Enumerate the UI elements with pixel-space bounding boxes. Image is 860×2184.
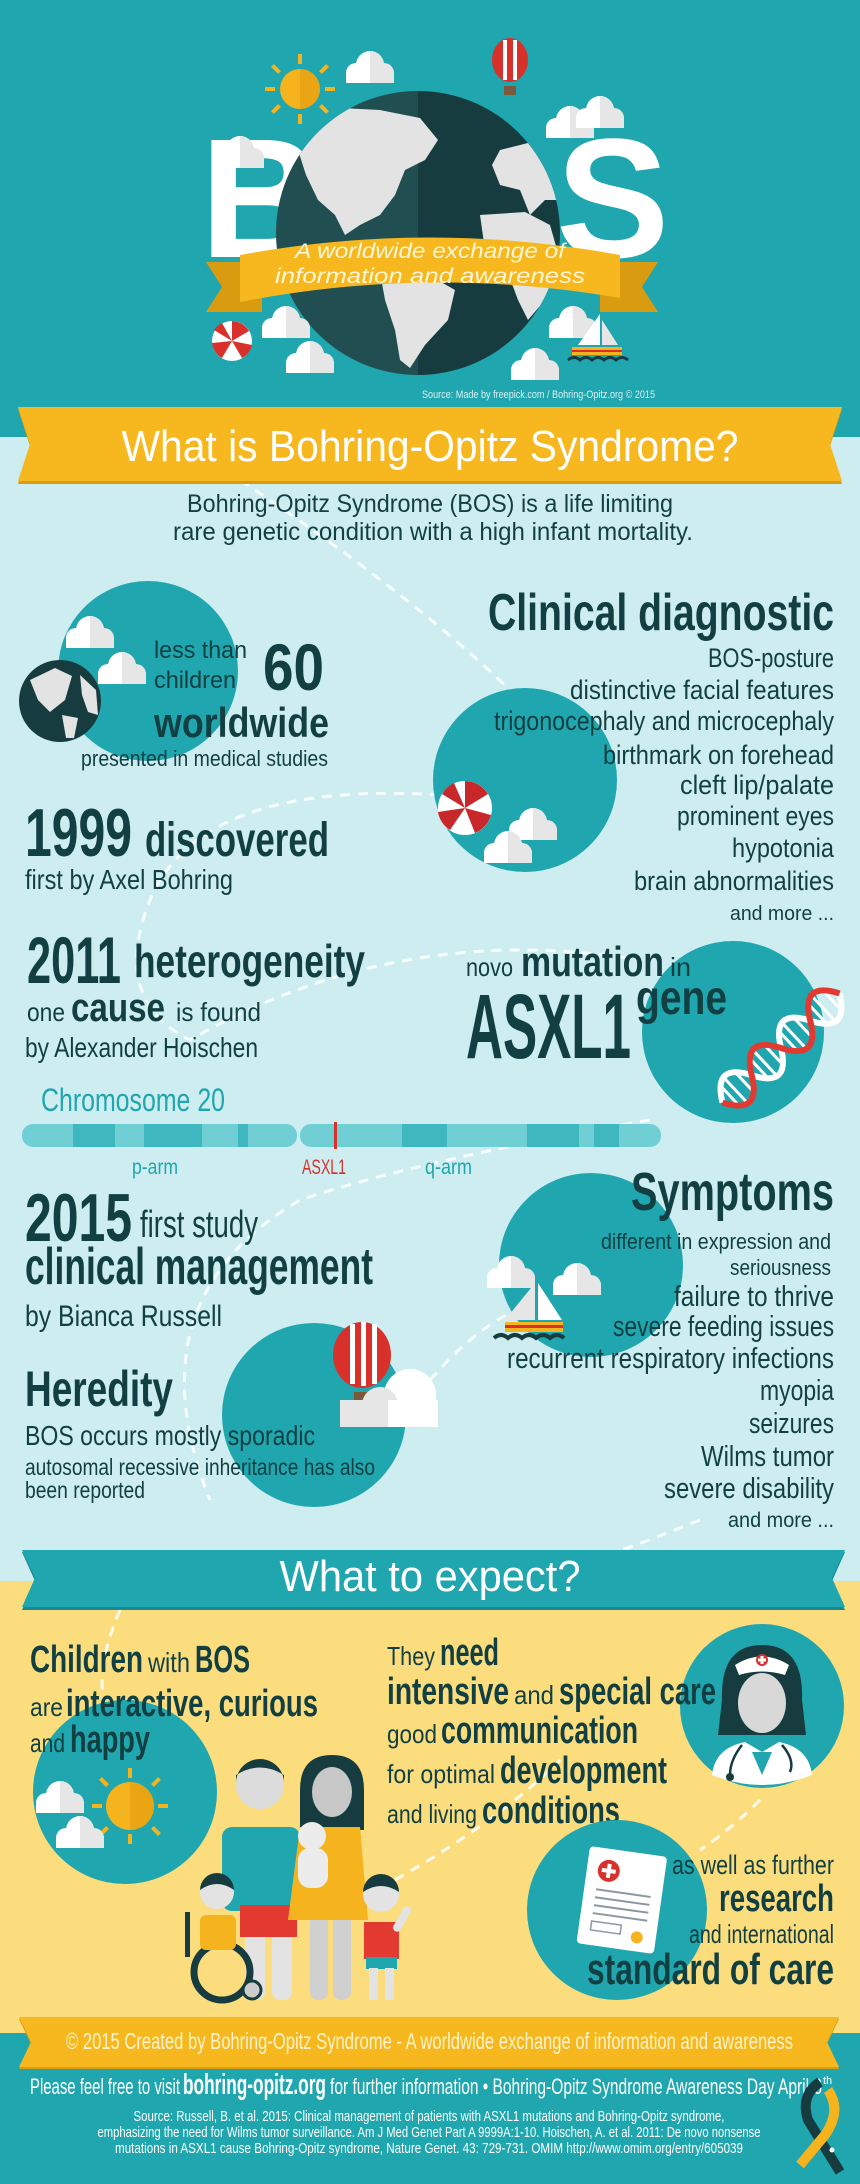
panel: clinical diagnostic: and more ...	[730, 903, 834, 925]
panel: children with BOS: Children	[30, 1639, 143, 1681]
father	[245, 1900, 265, 2000]
panel: ASXL1 gene: mutation	[521, 938, 664, 985]
panel: they need care: special care	[559, 1671, 716, 1713]
text: 2015 first study: by Bianca Russell	[25, 1300, 222, 1333]
panel: research and standard of care	[527, 1820, 834, 2000]
panel: they need care: good	[387, 1719, 437, 1749]
panel: they need care: and	[514, 1680, 554, 1710]
illustration: family	[185, 1755, 412, 2000]
banner: What to expect?: What to expect?	[280, 1552, 580, 1601]
footer banner	[19, 2017, 839, 2069]
circle	[58, 581, 238, 761]
panel: clinical diagnostic	[433, 584, 835, 925]
panel: clinical diagnostic: cleft lip/palate	[680, 770, 834, 800]
panel: heredity: Heredity	[25, 1361, 173, 1417]
footer info line: th	[823, 2075, 832, 2087]
text: 2015 first study	[25, 1180, 373, 1333]
panel: clinical diagnostic: brain abnormalities	[634, 866, 834, 896]
icon: beach ball	[212, 321, 252, 361]
footer info line	[30, 2069, 832, 2101]
hero: BOS logo with globe	[200, 38, 669, 401]
mother	[300, 1755, 364, 1830]
text: 2011 heterogeneity	[25, 923, 365, 1063]
panel: clinical diagnostic: birthmark on forehead	[603, 740, 834, 770]
text: 1999 discovered: discovered	[145, 814, 329, 867]
panel: symptoms: seizures	[749, 1408, 834, 1440]
panel: children with BOS	[30, 1639, 318, 1884]
panel: 60 children worldwide: less than	[154, 637, 247, 664]
icon: balloon	[492, 38, 528, 95]
panel: they need care: development	[500, 1750, 667, 1792]
circle	[527, 1820, 707, 2000]
icon: DNA	[710, 980, 852, 1116]
circle with sun	[33, 1700, 217, 1884]
chromosome 20 diagram: p-arm	[132, 1156, 178, 1179]
text: 2011 heterogeneity: heterogeneity	[134, 935, 365, 987]
panel: they need care: intensive	[387, 1671, 509, 1713]
BOS letters: B	[200, 104, 323, 294]
panel: ASXL1 gene: novo	[466, 952, 513, 982]
panel: clinical diagnostic: prominent eyes	[677, 801, 834, 831]
icon: sailboat	[494, 1283, 564, 1338]
panel: children with BOS: with	[147, 1647, 190, 1678]
panel: they need care: for optimal	[387, 1759, 495, 1789]
text: 1999 discovered: 1999	[25, 795, 132, 871]
panel: 60 children worldwide: presented in medical studies	[81, 746, 328, 771]
panel: ASXL1 gene: in	[670, 952, 691, 982]
intro text: rare genetic condition with a high infant mortality.	[173, 518, 693, 546]
panel: ASXL1 gene	[466, 938, 852, 1123]
panel: symptoms	[487, 1162, 835, 1532]
clouds	[216, 51, 624, 380]
icon: awareness ribbon	[800, 2082, 840, 2172]
panel: heredity: autosomal recessive inheritance has also	[25, 1454, 375, 1480]
backgrounds	[0, 0, 860, 437]
panel: children with BOS: and	[30, 1728, 65, 1758]
panel: ASXL1 gene: gene	[636, 972, 727, 1025]
footer sources	[98, 2108, 760, 2157]
footer info line: Please feel free to visit	[30, 2074, 180, 2099]
text: 2015 first study: first study	[140, 1204, 258, 1246]
text: 2011 heterogeneity: by Alexander Hoischen	[25, 1032, 258, 1063]
source credit: Source: Made by freepick.com / Bohring-Opitz.org © 2015	[422, 389, 655, 401]
panel: 60 children worldwide: 60	[263, 630, 324, 704]
panel: symptoms: myopia	[760, 1375, 835, 1407]
wheelchair child	[194, 1944, 250, 2000]
panel: they need care: conditions	[482, 1790, 620, 1832]
panel: they need care	[387, 1632, 716, 1832]
text: 2015 first study: 2015	[25, 1180, 132, 1256]
BOS letters: S	[556, 104, 669, 294]
circle	[642, 941, 824, 1123]
right child	[363, 1876, 399, 1912]
panel: children with BOS: happy	[70, 1719, 150, 1761]
text: 1999 discovered: first by Axel Bohring	[25, 864, 233, 895]
panel: children with BOS: BOS	[195, 1639, 250, 1681]
icon: globe	[19, 660, 101, 742]
text: 2011 heterogeneity: cause	[71, 986, 165, 1030]
icon: document	[576, 1846, 667, 1954]
globe	[276, 91, 560, 375]
baby	[298, 1822, 326, 1850]
BOS letters	[200, 104, 669, 294]
panel: heredity: been reported	[25, 1477, 145, 1503]
panel: 60 children worldwide	[19, 581, 329, 771]
icon: sun	[265, 54, 335, 124]
circle	[222, 1323, 406, 1507]
banner ribbon	[206, 238, 658, 312]
cloud	[340, 1369, 438, 1427]
chromosome 20 diagram: q-arm	[425, 1156, 472, 1179]
text: 2011 heterogeneity: is found	[176, 997, 261, 1027]
icon: beach ball	[438, 781, 492, 835]
chromosome 20 diagram	[22, 1082, 661, 1179]
banner ribbon: A worldwide exchange of	[293, 240, 567, 263]
panel: children with BOS: interactive, curious	[66, 1683, 318, 1725]
panel: symptoms: and more ...	[728, 1509, 834, 1532]
dashed path decoration	[102, 480, 760, 1880]
panel: ASXL1 gene: ASXL1	[466, 976, 631, 1078]
text: 1999 discovered	[25, 795, 329, 895]
intro text: Bohring-Opitz Syndrome (BOS) is a life limiting	[187, 490, 673, 518]
chromosome 20 diagram: ASXL1	[302, 1156, 346, 1179]
icon: sailboat	[568, 314, 628, 360]
panel: children with BOS: are	[30, 1692, 63, 1722]
banner ribbon: information and awareness	[275, 265, 586, 288]
BOS letters: O	[330, 104, 462, 294]
circle	[433, 688, 617, 872]
panel: 60 children worldwide: worldwide	[153, 699, 329, 746]
circle	[499, 1173, 683, 1357]
text: 2011 heterogeneity: one	[27, 997, 65, 1027]
panel: heredity	[25, 1322, 438, 1507]
banner: What is Bohring-Opitz Syndrome?: What is Bohring-Opitz Syndrome?	[122, 422, 738, 471]
text: 2015 first study: clinical management	[25, 1238, 373, 1296]
panel: symptoms: failure to thrive	[674, 1281, 834, 1313]
panel: clinical diagnostic: BOS-posture	[708, 643, 834, 673]
footer info line: bohring-opitz.org	[183, 2069, 326, 2101]
text: 2011 heterogeneity: 2011	[27, 923, 121, 997]
chromosome 20 diagram: Chromosome 20	[41, 1082, 225, 1118]
banner: What is Bohring-Opitz Syndrome?	[18, 407, 842, 484]
panel: 60 children worldwide: children	[154, 667, 236, 694]
banner: What to expect?	[22, 1550, 845, 1610]
panel: heredity: BOS occurs mostly sporadic	[25, 1420, 315, 1451]
icon: nurse	[680, 1624, 844, 1788]
panel: clinical diagnostic: distinctive facial features	[570, 675, 834, 705]
panel: they need care: and living	[387, 1799, 477, 1829]
panel: symptoms: different in expression and	[601, 1229, 831, 1254]
panel: they need care: need	[440, 1632, 499, 1674]
panel: symptoms: seriousness	[730, 1255, 831, 1280]
panel: clinical diagnostic: hypotonia	[732, 833, 835, 863]
panel: they need care: communication	[441, 1710, 638, 1752]
panel: symptoms: Wilms tumor	[701, 1441, 834, 1473]
panel: they need care: They	[387, 1641, 435, 1671]
intro text	[173, 490, 693, 546]
icon: balloon	[333, 1322, 391, 1406]
